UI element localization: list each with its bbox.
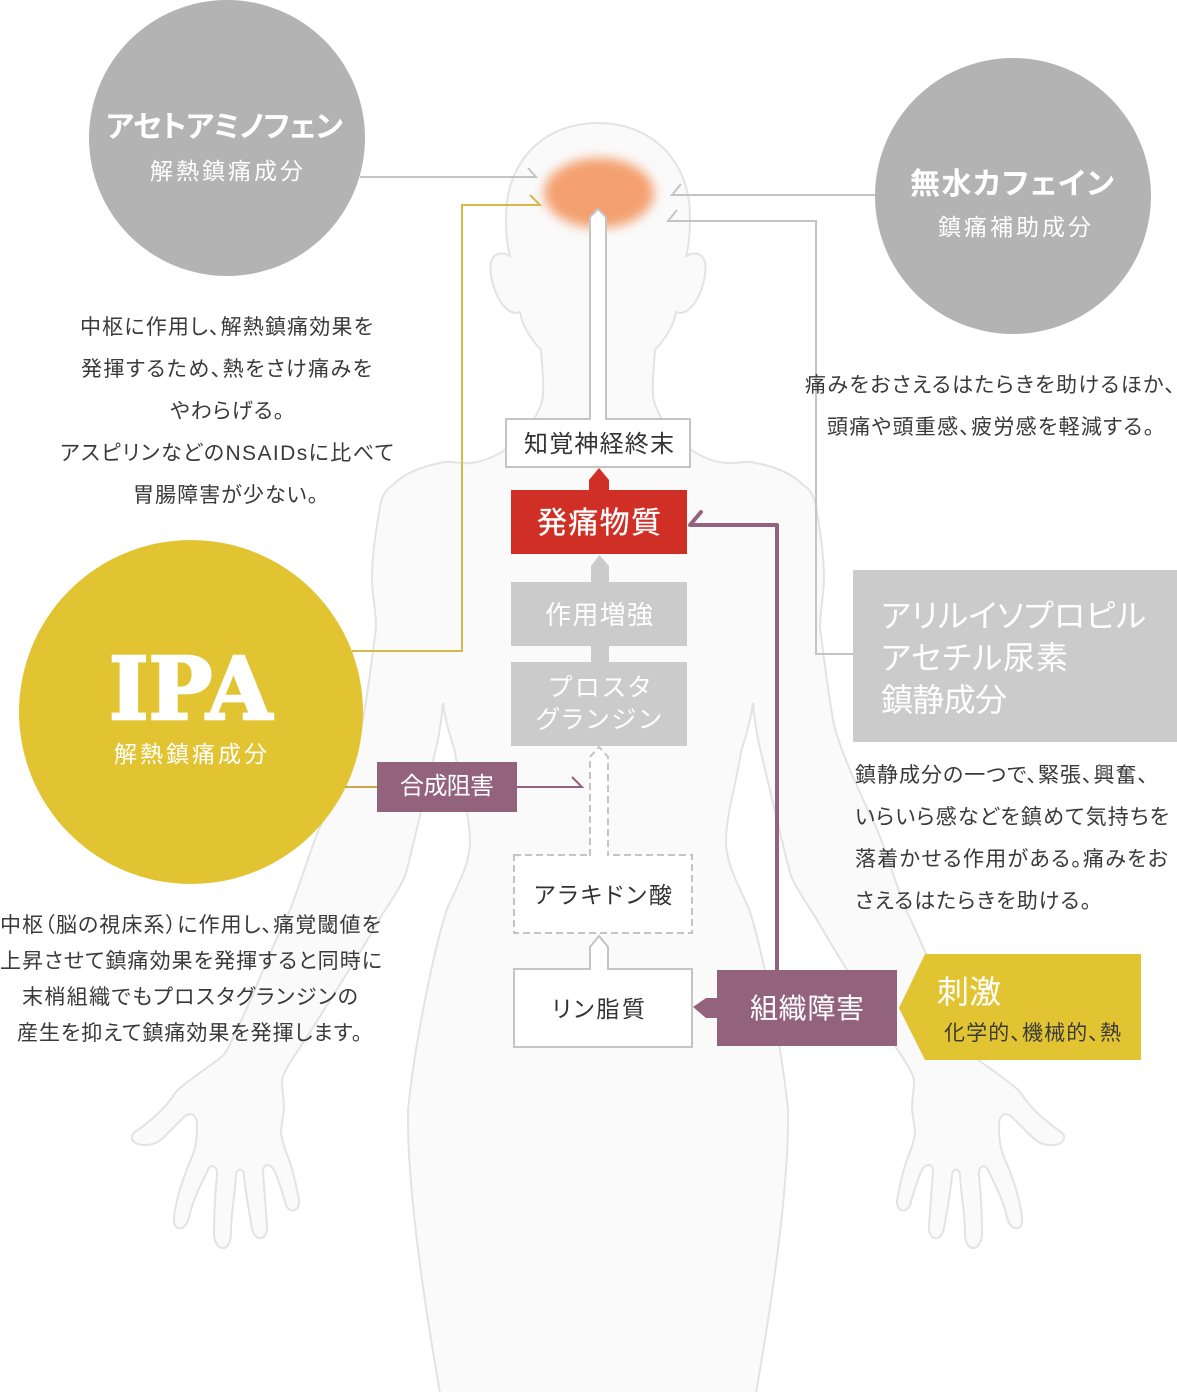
human body silhouette	[132, 123, 1064, 1392]
text: caffeine description: 痛みをおさえるはたらきを助けるほか、	[805, 374, 1175, 397]
text: caffeine description: 頭痛や頭重感、疲労感を軽減する。	[827, 416, 1154, 439]
box: phospholipid	[514, 969, 692, 1047]
text: acetaminophen description: 発揮するため、熱をさけ痛みを	[81, 358, 372, 381]
circle: acetaminophen: アセトアミノフェン	[106, 111, 343, 144]
arrow: potentiation to pain substance	[591, 555, 609, 582]
box: synthesis inhibition: 合成阻害	[400, 773, 494, 800]
box: synthesis inhibition	[377, 762, 517, 812]
text: IPA description: 中枢（脳の視床系）に作用し、痛覚閾値を	[0, 914, 381, 937]
text: acetaminophen description: やわらげる。	[170, 400, 284, 423]
text: acetaminophen description: 中枢に作用し、解熱鎮痛効果を	[80, 316, 373, 339]
circle: acetaminophen: 解熱鎮痛成分	[150, 158, 303, 184]
tag: stimulus: 刺激	[937, 974, 1001, 1010]
box: allylisopropylacetylurea: アセチル尿素	[881, 640, 1068, 676]
box: nerve endings	[506, 419, 690, 467]
dashed arrow: arachidonic acid to prostaglandin	[590, 747, 608, 856]
box: nerve endings: 知覚神経終末	[524, 431, 674, 458]
box: tissue damage: 組織障害	[750, 993, 864, 1024]
text: acetaminophen description	[60, 316, 394, 507]
box: arachidonic acid	[514, 855, 692, 933]
connector: IPA to synthesis inhibition	[345, 786, 377, 788]
circle: anhydrous caffeine: 鎮痛補助成分	[938, 214, 1091, 240]
arrow: tissue damage to phospholipid	[693, 998, 717, 1018]
text: sedative description	[855, 764, 1169, 913]
box: allylisopropylacetylurea	[853, 570, 1177, 742]
text: caffeine description	[805, 374, 1175, 439]
box: phospholipid: リン脂質	[552, 996, 645, 1022]
brain pain area	[544, 158, 654, 228]
box: pain substance	[511, 490, 687, 554]
box: tissue damage	[717, 970, 897, 1046]
box: pain substance: 発痛物質	[537, 507, 661, 540]
text: IPA description: 産生を抑えて鎮痛効果を発揮します。	[17, 1022, 362, 1045]
text: IPA description	[0, 914, 382, 1045]
text: IPA description: 末梢組織でもプロスタグランジンの	[22, 986, 358, 1009]
circle: IPA: IPA	[109, 639, 273, 740]
box: allylisopropylacetylurea: 鎮静成分	[881, 682, 1007, 718]
tag: stimulus	[899, 954, 1141, 1060]
text: acetaminophen description: アスピリンなどのNSAIDsに比べて	[60, 442, 394, 465]
connector between potentiation and prostaglandin	[591, 646, 609, 662]
arrow: synthesis inhibition	[517, 777, 582, 787]
arrow: acetaminophen to brain	[360, 168, 536, 177]
arrow: nerve ending to brain	[590, 209, 606, 420]
circle: anhydrous caffeine: 無水カフェイン	[910, 168, 1114, 201]
arrow: pain substance to nerve ending	[589, 468, 609, 490]
arrow: allylisopropylacetylurea to brain	[668, 210, 853, 654]
box: potentiation: 作用増強	[545, 600, 653, 630]
circle: anhydrous caffeine	[875, 58, 1151, 334]
box: arachidonic acid: アラキドン酸	[534, 882, 672, 908]
box: potentiation	[511, 582, 687, 646]
arrow: phospholipid to arachidonic acid	[590, 936, 608, 970]
text: sedative description: 鎮静成分の一つで、緊張、興奮、	[855, 764, 1148, 787]
circle: IPA	[19, 540, 363, 884]
text: acetaminophen description: 胃腸障害が少ない。	[133, 484, 318, 507]
text: sedative description: さえるはたらきを助ける。	[855, 890, 1091, 913]
box: allylisopropylacetylurea: アリルイソプロピル	[881, 598, 1146, 634]
text: IPA description: 上昇させて鎮痛効果を発揮すると同時に	[0, 950, 382, 973]
box: prostaglandin: プロスタ	[549, 674, 650, 702]
arrow: tissue damage to pain substance	[690, 512, 777, 970]
circle: IPA: 解熱鎮痛成分	[114, 741, 267, 767]
tag: stimulus: 化学的、機械的、熱	[944, 1022, 1121, 1045]
box: prostaglandin	[511, 662, 687, 746]
text: sedative description: いらいら感などを鎮めて気持ちを	[855, 806, 1169, 829]
box: prostaglandin: グランジン	[536, 706, 661, 734]
arrow: caffeine to brain	[672, 184, 876, 195]
text: sedative description: 落着かせる作用がある。痛みをお	[855, 848, 1168, 871]
arrow: IPA to brain	[352, 195, 540, 651]
circle: acetaminophen	[89, 0, 365, 276]
